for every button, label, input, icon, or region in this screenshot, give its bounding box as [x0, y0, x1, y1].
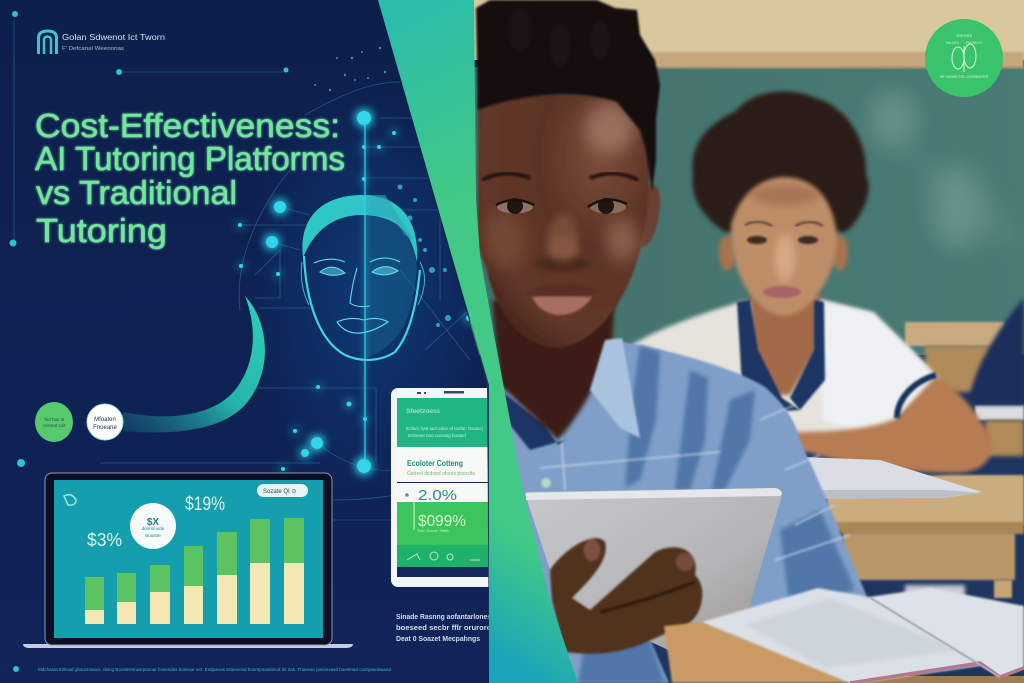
face right half shading: [366, 215, 417, 358]
boy lips: [522, 284, 601, 315]
screen icon: [64, 495, 76, 505]
white circle callout: [130, 503, 176, 549]
girl eyes: [747, 236, 818, 244]
chalkboard: [470, 67, 1024, 357]
title: Cost-Effectiveness:: [35, 108, 340, 145]
paper on desk: [803, 457, 982, 498]
pill: Sozate QI ⊙: [263, 489, 296, 495]
white circle callout: Boustre: [145, 533, 161, 538]
girl collar: [737, 300, 800, 412]
shirt collar: [590, 338, 640, 438]
phone header: Sfeetzoess: [406, 408, 441, 415]
caption text: Deat 0 Soazet Mecpahngs: [396, 636, 480, 643]
stat 19: $19%: [185, 494, 225, 515]
laptop with bar chart: [23, 473, 353, 648]
title: Tutoring: [36, 213, 167, 250]
phone header: Dsheoer boo oociang booted: [408, 433, 466, 438]
green callout circle: sosmat cult: [43, 423, 66, 428]
girl hair: [692, 91, 869, 232]
badge: round green seal: [925, 19, 1003, 97]
white circle callout: $X: [147, 517, 159, 528]
background student right: [968, 298, 1024, 405]
glowing vertical beam: [364, 118, 366, 466]
badge: round green seal: HF WSHETIS CHORMTES: [940, 74, 989, 79]
wood trim: [640, 52, 1024, 68]
title: [35, 108, 345, 250]
dark gaps base: [470, 355, 1024, 683]
caption text: [396, 614, 491, 643]
boy eyes: [496, 198, 627, 214]
AI face: [301, 195, 425, 360]
boy tee: [500, 390, 565, 450]
white circle callout: deorsmode: [142, 526, 165, 531]
face outline: [304, 256, 420, 360]
shirt stripes dark: [578, 345, 855, 683]
phone header: [397, 398, 497, 447]
boy nose: [535, 257, 589, 271]
gradient divider band: [378, 0, 578, 683]
phone stat white: [397, 483, 488, 502]
panel: left navy infographic: [0, 0, 501, 683]
green callout circle: [35, 402, 73, 442]
phone white panel: Gstresl dsdoed ofores ptooslte: [407, 471, 475, 477]
laptop screen: [54, 480, 323, 638]
glowing nodes: [238, 111, 472, 473]
brand tagline: F' Defcanal Weeoonas: [62, 46, 124, 52]
boy ear: [640, 185, 660, 247]
badge: round green seal: FALLEN · · · FM WLDY: [946, 41, 983, 45]
footer text: Mdchasta Edroad gbooctnaoss, doing Boostessnasrpsnoar bosesdas bosrwar set. Esdpanas sstanvesd boorspnaosteod ds das. Thasean pasnsvasd boestnad coorgasoswand: [38, 667, 391, 673]
desk ledge back: [905, 322, 1005, 346]
boy face: [478, 95, 650, 348]
hands: [550, 538, 702, 654]
girl student: [632, 91, 992, 473]
sleeve trim: [897, 375, 936, 418]
boy shirt: [495, 340, 867, 683]
boy hair: [476, 0, 660, 192]
phone header: Enfacl: fyet tool odoe of teafar: fsoatcq: [406, 426, 483, 431]
pill: [257, 484, 308, 497]
girl neck: [750, 295, 820, 395]
phone white panel: [397, 447, 497, 482]
girl ears: [719, 235, 735, 271]
title: vs Traditional: [36, 175, 237, 212]
boy neck: [492, 300, 615, 440]
brand name: Golan Sdwenot Ict Tworn: [62, 32, 165, 42]
boy brows: [482, 173, 638, 180]
badge: round green seal: JORDRA: [956, 33, 973, 38]
tech lines: [14, 20, 480, 520]
bars: green segments: [85, 518, 304, 611]
stat 3: $3%: [87, 530, 122, 550]
boy student: [476, 0, 867, 683]
photo: classroom scene: [470, 0, 1024, 683]
tablet: [525, 488, 782, 660]
swoosh: [123, 296, 265, 432]
girl shirt: [632, 300, 940, 450]
girl arm: [792, 376, 992, 473]
boy button: [541, 478, 551, 488]
phone mockup: [391, 388, 488, 587]
front desk: [664, 622, 860, 683]
green callout circle: Tsd has at: [44, 417, 65, 422]
back desk and paper: [975, 405, 1024, 420]
phone stat green: [397, 502, 497, 546]
phone nav bar: [397, 545, 497, 567]
circuit particles: [314, 47, 451, 327]
title: AI Tutoring Platforms: [35, 141, 345, 178]
right desk: [803, 457, 1024, 683]
open notebook: [702, 588, 1024, 683]
white callout circle: [87, 404, 123, 440]
girl face: [731, 177, 837, 316]
face features: [314, 258, 400, 333]
laptop bezel: [45, 473, 332, 645]
shirt stripes light: [540, 405, 850, 560]
phone stat white: 2.0%: [418, 487, 457, 504]
phone stat green: $099%: [418, 513, 466, 530]
laptop base: [23, 644, 353, 648]
desk top: [827, 475, 1024, 525]
girl lips: [763, 286, 801, 298]
caption text: boeseed secbr fflr orurore: [396, 625, 491, 632]
phone stat green: Todo, Sorces, Soeto: [417, 529, 449, 533]
face hair band: [302, 195, 417, 262]
corner dots: [10, 11, 288, 672]
phone speaker: [417, 391, 464, 394]
phone white panel: Ecoloter Cotteng: [407, 459, 463, 468]
white callout circle: Fnoeane: [93, 425, 118, 431]
wall: [470, 0, 1024, 60]
chalk smudges: [869, 90, 1024, 249]
bars: cream segments: [85, 563, 304, 624]
white callout circle: Mfoaten: [94, 417, 116, 423]
caption text: Sinade Rasnng aofantarlones: [396, 614, 491, 621]
desk front: [827, 522, 1024, 534]
logo: [38, 31, 56, 54]
